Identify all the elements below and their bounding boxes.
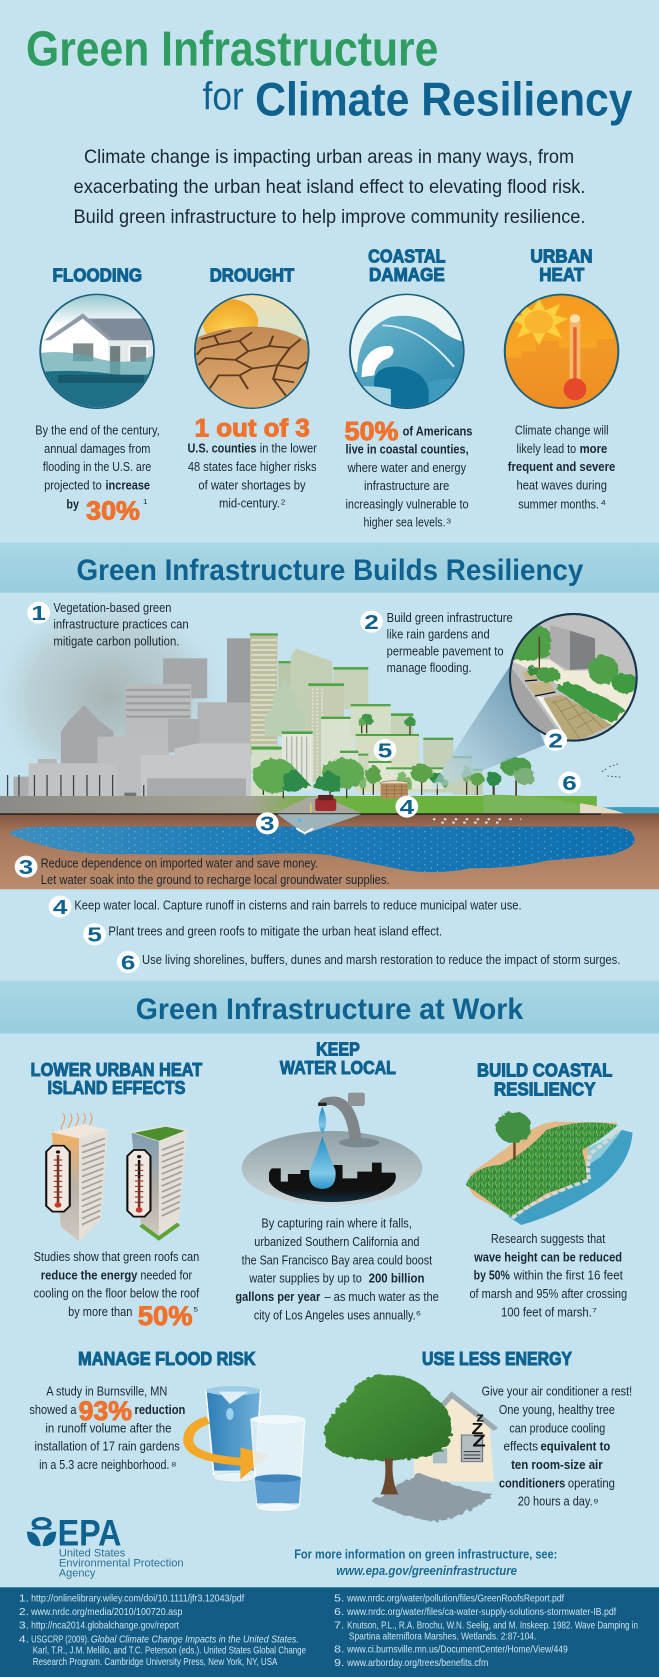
soil and aquifer: [0, 813, 659, 889]
text block: drought: of water shortages by: [198, 479, 306, 493]
panel: build coastal resiliency: [466, 1061, 633, 1320]
logo: EPA: EPA: [58, 1513, 121, 1554]
text block: coastal damage: infrastructure are: [364, 479, 449, 494]
footer references: http://onlinelibrary.wiley.com/doi/10.1111/jfr3.12043/pdf: [31, 1594, 245, 1604]
text block: [482, 1384, 632, 1509]
icon: tree shading house: [324, 1374, 496, 1522]
callout 3: Reduce dependence on imported water and save money.: [41, 856, 318, 871]
panel: lower urban heat island effects: [31, 1060, 202, 1331]
callout 2: 2: [364, 611, 379, 633]
heading: MANAGE FLOOD RISK: [78, 1349, 256, 1369]
text block: drought: [187, 414, 317, 511]
text block: A study in Burnsville, MN: [46, 1384, 167, 1399]
text block: drought: 1 out of 3: [195, 414, 310, 442]
text block: flooding: 1: [143, 498, 148, 506]
text block: urban heat: more: [580, 442, 607, 456]
text block: city of Los Angeles uses annually.: [254, 1308, 416, 1323]
text block: coastal damage: 50%: [345, 418, 398, 446]
heading: WATER LOCAL: [280, 1058, 396, 1078]
icon: tree shading house: z: [476, 1411, 484, 1425]
callout 3: [15, 856, 390, 887]
footer references: 7.: [334, 1621, 344, 1631]
panel: drought: [187, 266, 317, 511]
section: green infrastructure at work: [31, 993, 633, 1331]
title: [26, 21, 633, 126]
text block: ten room-size air: [511, 1458, 603, 1473]
logo: EPA: Environmental Protection: [59, 1556, 184, 1569]
shoreline and beach: [483, 795, 659, 821]
text block: conditioners: [499, 1476, 565, 1491]
text block: flooding: By the end of the century,: [35, 424, 160, 438]
callout 1: infrastructure practices can: [53, 617, 189, 632]
panel: manage flood risk: [29, 1349, 305, 1512]
footer references: 6.: [334, 1607, 344, 1618]
icon: tree shading house: Z: [472, 1432, 486, 1451]
text block: by 50%: [474, 1268, 510, 1283]
icon: breaking wave: [349, 293, 467, 410]
callout 5: 5: [87, 923, 102, 946]
text block: can produce cooling: [509, 1421, 605, 1436]
callout 6: [117, 951, 620, 974]
text block: coastal damage: higher sea levels.: [364, 516, 446, 530]
footer references: 8.: [334, 1645, 344, 1655]
callout 5: Plant trees and green roofs to mitigate the urban heat island effect.: [108, 924, 442, 939]
text block: drought: 2: [281, 498, 285, 506]
title: for: [203, 75, 244, 118]
text block: showed a: [29, 1403, 77, 1418]
callout 2: permeable pavement to: [387, 644, 504, 659]
text block: [235, 1216, 439, 1323]
footer references: www.nrdc.org/media/2010/100720.asp: [30, 1607, 182, 1618]
heading: BUILD COASTAL: [477, 1061, 613, 1081]
text block: gallons per year: [235, 1290, 320, 1304]
section: cross-section foreground: [0, 757, 659, 889]
callout 4: 4: [53, 896, 67, 918]
callout 3: Let water soak into the ground to recharge local groundwater supplies.: [41, 873, 390, 887]
logo: EPA: [27, 1513, 184, 1579]
heading: flooding: FLOODING: [53, 266, 142, 286]
text block: by more than: [68, 1305, 132, 1319]
callout 2: like rain gardens and: [387, 627, 490, 642]
intro text: [74, 145, 585, 228]
road and car: [275, 795, 361, 813]
heading: coastal damage: DAMAGE: [369, 266, 445, 286]
more information link: www.epa.gov/greeninfrastructure: [336, 1564, 517, 1578]
trees near shoreline: [487, 757, 535, 798]
text block: reduce the energy: [41, 1268, 138, 1283]
icon: water glasses and arrow: [188, 1386, 305, 1512]
badge: 2 rain garden: [544, 729, 567, 752]
panel: coastal damage: [345, 247, 472, 530]
grey city: [8, 638, 251, 797]
callout 2: [360, 611, 513, 676]
illustration: grey city, ground: [0, 590, 597, 815]
text block: needed for: [140, 1268, 192, 1283]
icon: faucet, drop and skyline: [242, 1093, 422, 1207]
footer references: 3.: [19, 1621, 29, 1631]
text block: 7: [592, 1306, 597, 1314]
icon: cracked earth and sun: [193, 293, 311, 410]
lens: rain garden detail: [427, 614, 640, 793]
badge: 3: 3: [260, 812, 275, 835]
panel: use less energy: [324, 1349, 632, 1522]
footer references: www.nrdc.org/water/pollution/files/GreenRoofsReport.pdf: [346, 1594, 565, 1604]
text block: water supplies by up to: [249, 1271, 362, 1286]
badge: 3: [256, 812, 279, 835]
text block: drought: 48 states face higher risks: [188, 460, 316, 475]
text block: 100 feet of marsh.: [501, 1305, 592, 1320]
panel: flooding: [35, 266, 160, 526]
heading: KEEP: [316, 1040, 360, 1060]
heading: urban heat: HEAT: [539, 266, 585, 286]
text block: flooding: by: [66, 498, 80, 512]
callout 5: [83, 923, 442, 946]
text block: coastal damage: increasingly vulnerable to: [345, 498, 469, 512]
footer references: 2.: [19, 1607, 29, 1618]
section: flood risk, energy, credits: [0, 1349, 659, 1677]
badge: 2 rain garden: 2: [548, 729, 563, 752]
badge: 4: 4: [400, 796, 414, 818]
text block: 20 hours a day.: [518, 1494, 593, 1509]
text block: coastal damage: [345, 418, 472, 530]
footer references: www.arborday.org/trees/benefits.cfm: [346, 1658, 488, 1669]
section: header and four climate impacts: [26, 21, 633, 530]
footer references: 4.: [19, 1635, 29, 1645]
heading: urban heat: URBAN: [530, 247, 593, 267]
panel: keep water local: [235, 1040, 439, 1323]
text block: urbanized Southern California and: [254, 1235, 419, 1249]
logo: EPA: Agency: [59, 1566, 96, 1579]
section heading band: [0, 543, 659, 593]
callout 1: mitigate carbon pollution.: [53, 634, 179, 649]
green city and trees: [250, 633, 500, 798]
text block: urban heat: 4: [601, 499, 606, 507]
text block: [34, 1250, 200, 1331]
callout 4: [49, 896, 522, 918]
icon: sun and thermometer: [504, 294, 618, 408]
icon: green roof building: [127, 1126, 187, 1238]
badge: 4: [396, 796, 418, 818]
text block: installation of 17 rain gardens: [34, 1439, 180, 1454]
text block: Studies show that green roofs can: [34, 1250, 199, 1264]
section heading: Green Infrastructure at Work: [136, 993, 524, 1026]
panel: urban heat: [504, 247, 618, 512]
footer references: Global Climate Change Impacts in the United States.: [91, 1635, 299, 1645]
heading: [280, 1040, 396, 1078]
text block: in a 5.3 acre neighborhood.: [39, 1458, 169, 1473]
heading: drought: DROUGHT: [210, 266, 295, 286]
cistern: [381, 783, 408, 798]
text block: flooding: annual damages from: [44, 442, 150, 456]
badge: 6: [558, 772, 581, 794]
text block: – as much water as the: [324, 1290, 439, 1304]
footer references: [0, 1587, 659, 1677]
text block: urban heat: heat waves during: [517, 479, 607, 493]
text block: drought: in the lower: [260, 442, 317, 456]
heading: coastal damage: COASTAL: [368, 247, 446, 267]
text block: drought: U.S. counties: [187, 442, 256, 456]
text block: coastal damage: where water and energy: [347, 461, 467, 475]
text block: 6: [416, 1309, 421, 1317]
badge: 6: 6: [562, 772, 577, 794]
badge: 5: 5: [378, 739, 392, 762]
callout 3: 3: [19, 856, 33, 878]
section band background: [0, 981, 659, 1033]
text block: cooling on the floor below the roof: [34, 1286, 200, 1301]
heading: RESILIENCY: [494, 1080, 596, 1100]
text block: 200 billion: [369, 1271, 425, 1286]
text block: coastal damage: 3: [446, 517, 451, 525]
footer references: USGCRP (2009).: [31, 1635, 89, 1645]
badge: 5: [374, 739, 396, 762]
section: green infrastructure builds resiliency, backdrop: [0, 543, 659, 815]
callout 2: manage flooding.: [387, 661, 472, 676]
text block: flooding: 30%: [86, 497, 140, 526]
text block: By capturing rain where it falls,: [261, 1216, 412, 1231]
heading: ISLAND EFFECTS: [47, 1078, 185, 1098]
text block: reduction: [134, 1403, 185, 1418]
text block: 5: [193, 1305, 198, 1313]
footer references: 5.: [334, 1594, 344, 1604]
footer references: http://nca2014.globalchange.gov/report: [31, 1621, 179, 1631]
footer references: 9.: [334, 1658, 344, 1669]
text block: urban heat: likely lead to: [517, 442, 576, 456]
section: badges and callouts: [15, 601, 620, 974]
text block: 8: [171, 1461, 176, 1468]
text block: urban heat: frequent and severe: [508, 460, 615, 475]
icon: marsh and water: [466, 1111, 633, 1225]
text block: operating: [568, 1476, 615, 1491]
heading: USE LESS ENERGY: [422, 1349, 572, 1369]
logo: EPA: United States: [59, 1546, 125, 1559]
text block: 9: [593, 1497, 598, 1505]
footer references: Karl, T.R., J.M. Melillo, and T.C. Peterson (eds.). United States Global Change: [33, 1646, 306, 1656]
footer references: Research Program. Cambridge University Press, New York, NY, USA: [33, 1657, 278, 1668]
callout 1: [27, 601, 189, 649]
text block: coastal damage: live in coastal counties,: [345, 443, 469, 457]
footer references: www.ci.burnsville.mn.us/DocumentCenter/Home/View/449: [346, 1645, 568, 1655]
footer references: 1.: [19, 1594, 29, 1604]
callout 6: 6: [121, 951, 135, 974]
text block: 50%: [138, 1302, 193, 1331]
callout 1: 1: [31, 602, 46, 624]
icon: flooded house: [38, 293, 160, 410]
text block: flooding: [35, 424, 160, 526]
text block: flooding: increase: [105, 479, 150, 493]
heading: coastal damage: [368, 247, 446, 286]
text block: drought: mid-century.: [219, 497, 280, 511]
text block: [469, 1232, 627, 1320]
heading: [31, 1060, 202, 1098]
callout 1: Vegetation-based green: [53, 601, 171, 616]
more information link: [294, 1547, 557, 1578]
text block: flooding: flooding in the U.S. are: [43, 460, 151, 475]
birds: [602, 764, 622, 777]
text block: the San Francisco Bay area could boost: [242, 1253, 433, 1268]
text block: 93%: [79, 1397, 132, 1426]
callout 2: Build green infrastructure: [387, 611, 513, 626]
icon: tree shading house: Z: [472, 1420, 484, 1438]
title: Green Infrastructure: [26, 21, 438, 76]
ground surface: [0, 796, 597, 815]
text block: effects: [504, 1439, 538, 1454]
text block: urban heat: Climate change will: [515, 424, 609, 438]
text block: in runoff volume after the: [45, 1421, 171, 1436]
text block: urban heat: [508, 424, 615, 512]
text block: equivalent to: [541, 1439, 610, 1454]
text block: [29, 1384, 185, 1473]
heading: urban heat: [530, 247, 593, 286]
icon: hot roof building: [46, 1113, 108, 1242]
footer references: Spartina alterniflora Marshes. Wetlands. 2:87-104.: [349, 1631, 536, 1642]
text block: urban heat: summer months.: [518, 498, 599, 512]
text block: flooding: projected to: [44, 479, 102, 493]
heading: [477, 1061, 613, 1100]
text block: coastal damage: of Americans: [403, 425, 472, 439]
heading: LOWER URBAN HEAT: [31, 1060, 202, 1080]
